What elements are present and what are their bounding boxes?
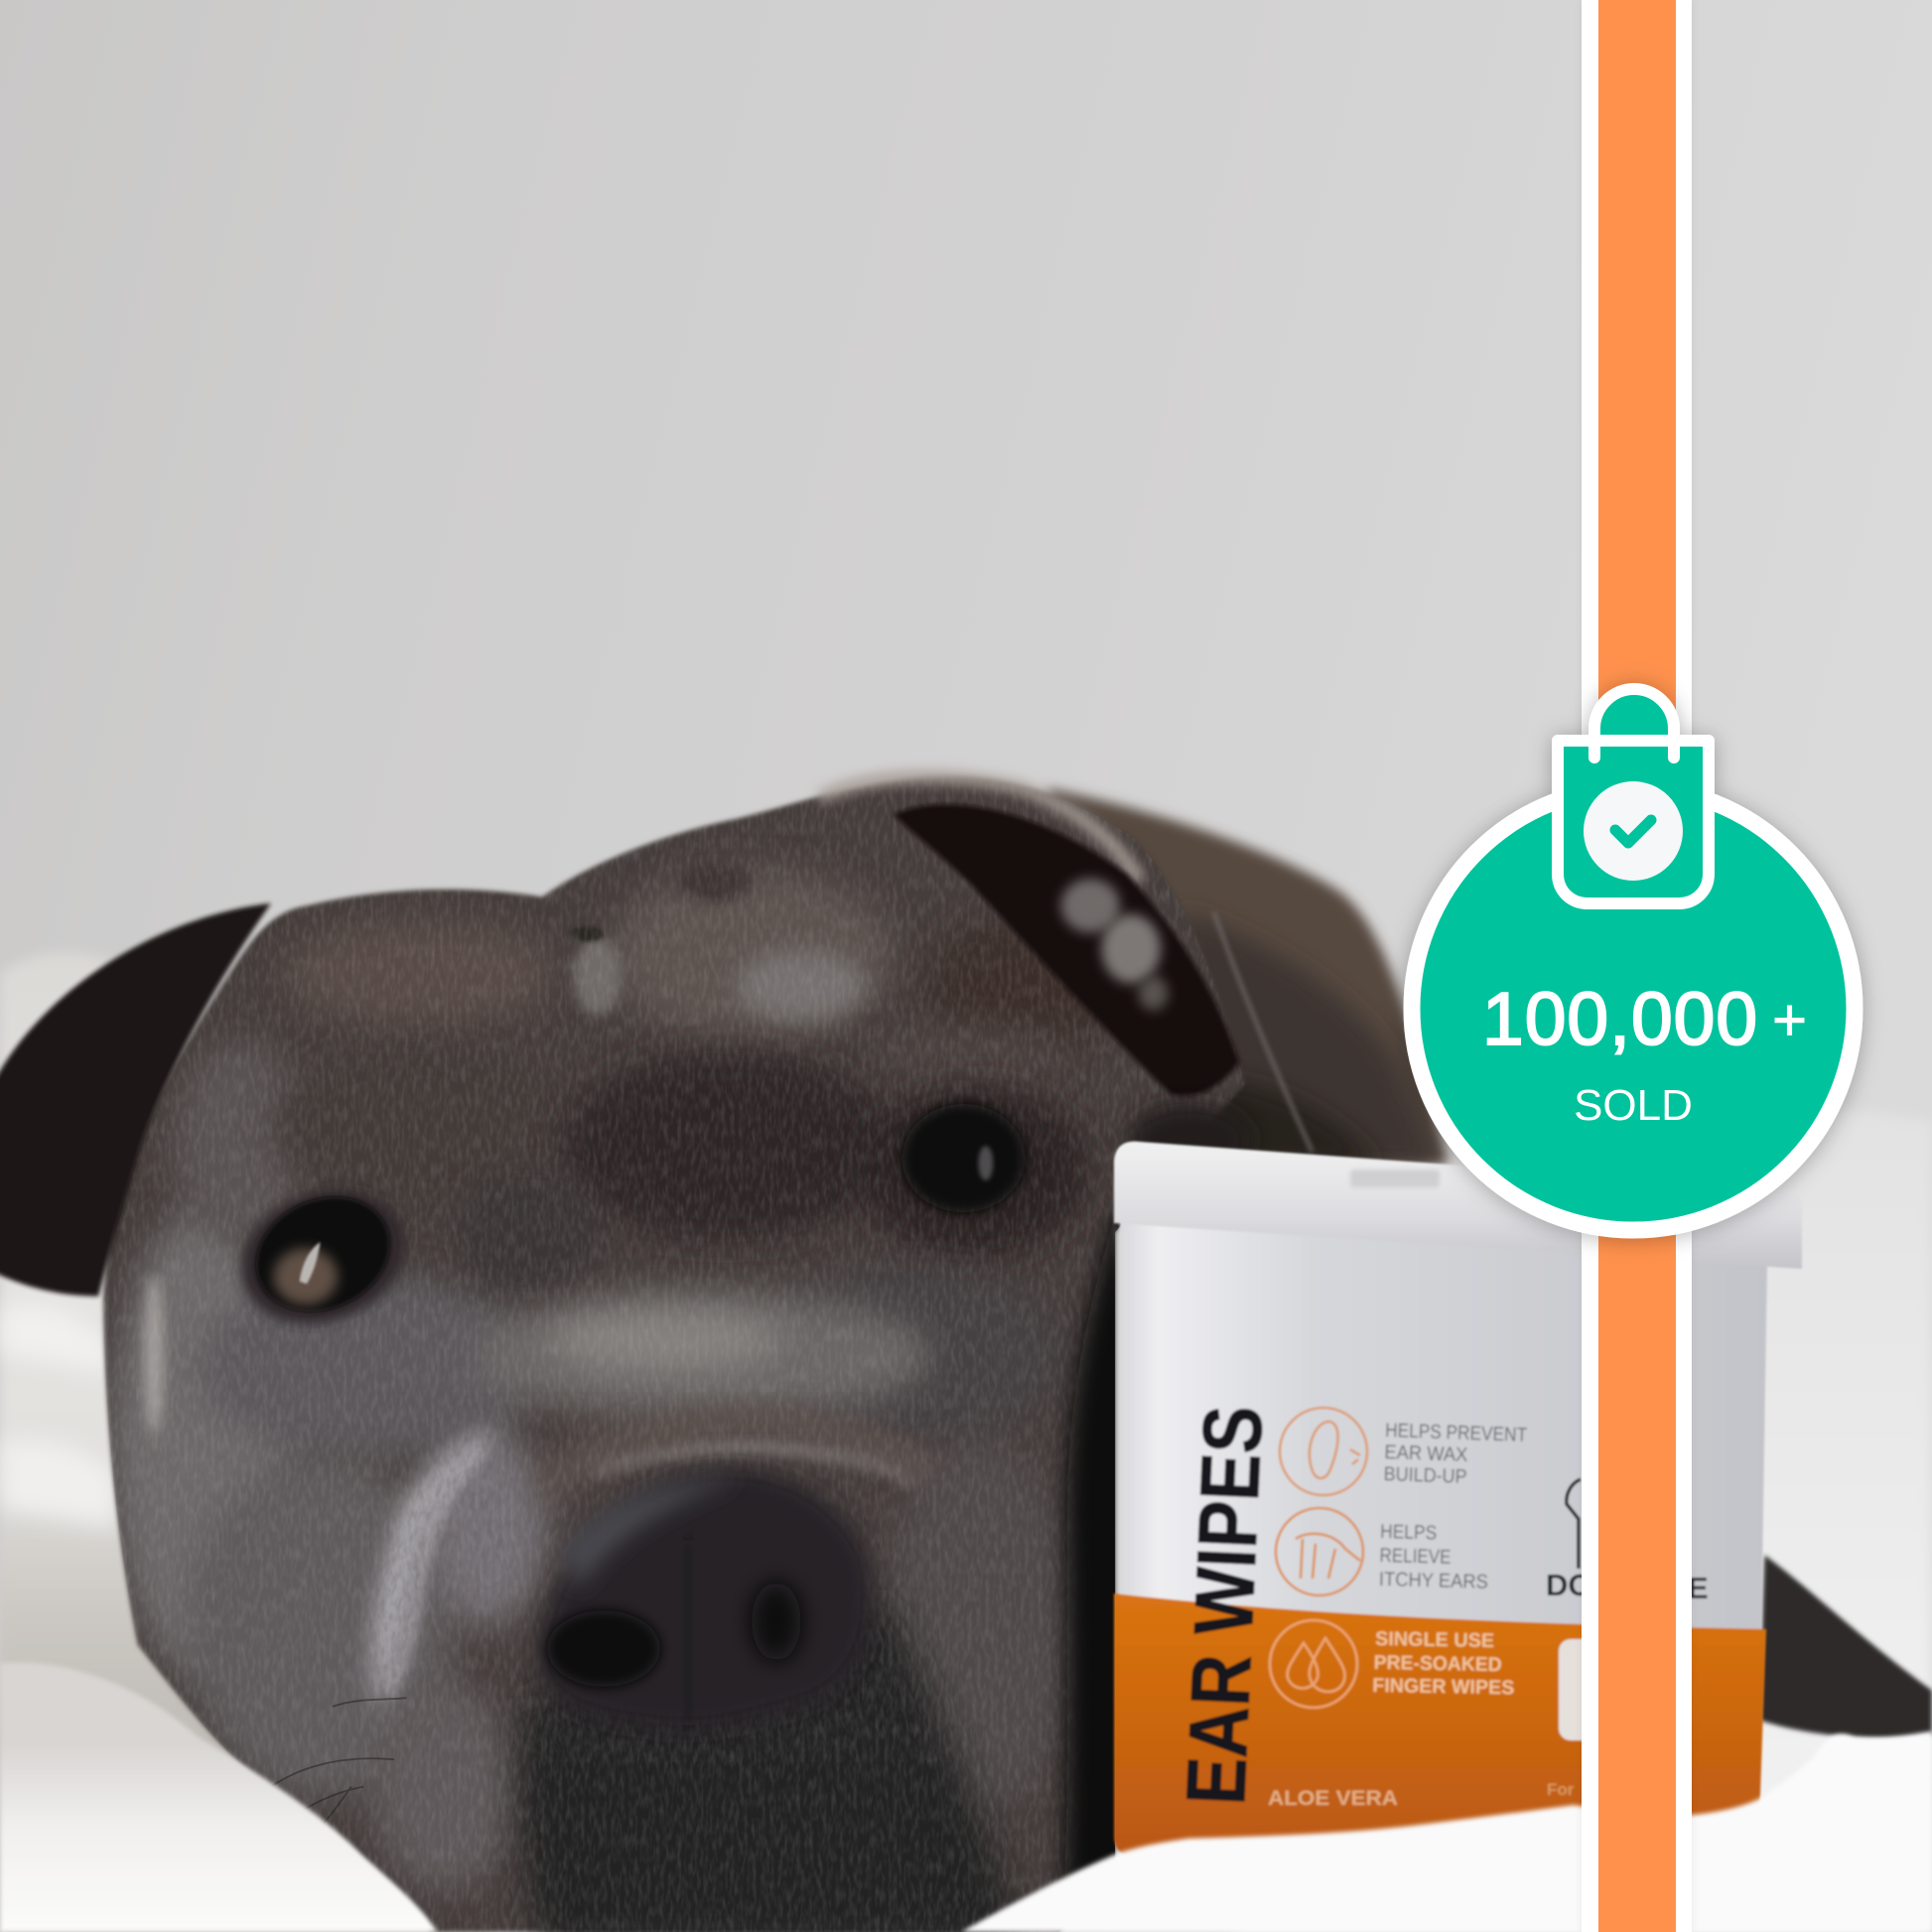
- claim: single use: SINGLE USE: [1375, 1628, 1494, 1652]
- plus sign: +: [1772, 987, 1807, 1053]
- nose: [536, 1468, 874, 1729]
- face shading: [104, 689, 1839, 1932]
- claim: itchy ears: HELPS: [1380, 1521, 1437, 1544]
- right ear: [819, 777, 1240, 1097]
- brand logo: E: [1688, 1571, 1709, 1605]
- sold label: SOLD: [1574, 1081, 1693, 1130]
- icon: water drops: [1270, 1620, 1357, 1708]
- product name: EAR WIPES: [1169, 1404, 1280, 1807]
- dog head: [0, 764, 1245, 1932]
- whiskers: [271, 1698, 407, 1839]
- badge circle: [1412, 787, 1855, 1230]
- claim: itchy ears: RELIEVE: [1379, 1545, 1451, 1569]
- claim: single use: FINGER WIPES: [1372, 1675, 1514, 1699]
- sold count: 100,000: [1482, 977, 1758, 1060]
- brand logo: DO: [1546, 1568, 1592, 1602]
- orange vertical stripe with white edges: [1582, 0, 1692, 1932]
- icon: shopping bag with check: [1558, 689, 1709, 903]
- variant label: ALOE VERA: [1268, 1787, 1398, 1810]
- ear wipes tub: [1114, 1142, 1802, 1857]
- brand logo: [1546, 1479, 1709, 1605]
- dog back and hind leg: [1047, 788, 1932, 1738]
- claim: itchy ears: ITCHY EARS: [1379, 1569, 1488, 1593]
- claim: single use: PRE-SOAKED: [1374, 1652, 1502, 1676]
- left ear: [0, 903, 271, 1297]
- claim: wax: [1383, 1420, 1528, 1490]
- left eye: [222, 1168, 424, 1345]
- right eye: [901, 1104, 1026, 1212]
- claim: wax: HELPS PREVENT: [1385, 1420, 1528, 1447]
- claim: wax: BUILD-UP: [1383, 1463, 1467, 1488]
- icon: ear wax: [1280, 1408, 1367, 1495]
- blanket foreground: [0, 1663, 1932, 1932]
- sold badge: [1412, 689, 1855, 1230]
- claim: wax: EAR WAX: [1384, 1442, 1468, 1466]
- tub orange band: [1114, 1593, 1766, 1857]
- blanket background: [0, 953, 1932, 1932]
- claim: single use: [1372, 1628, 1515, 1699]
- shadow between ear and tub: [1128, 1103, 1251, 1176]
- small print: For: [1547, 1780, 1575, 1799]
- tub body: [1120, 1216, 1767, 1638]
- white label patch: [1559, 1639, 1598, 1740]
- tub lid: [1114, 1142, 1802, 1269]
- icon: itchy dog: [1276, 1508, 1363, 1595]
- claim: itchy ears: [1379, 1521, 1489, 1593]
